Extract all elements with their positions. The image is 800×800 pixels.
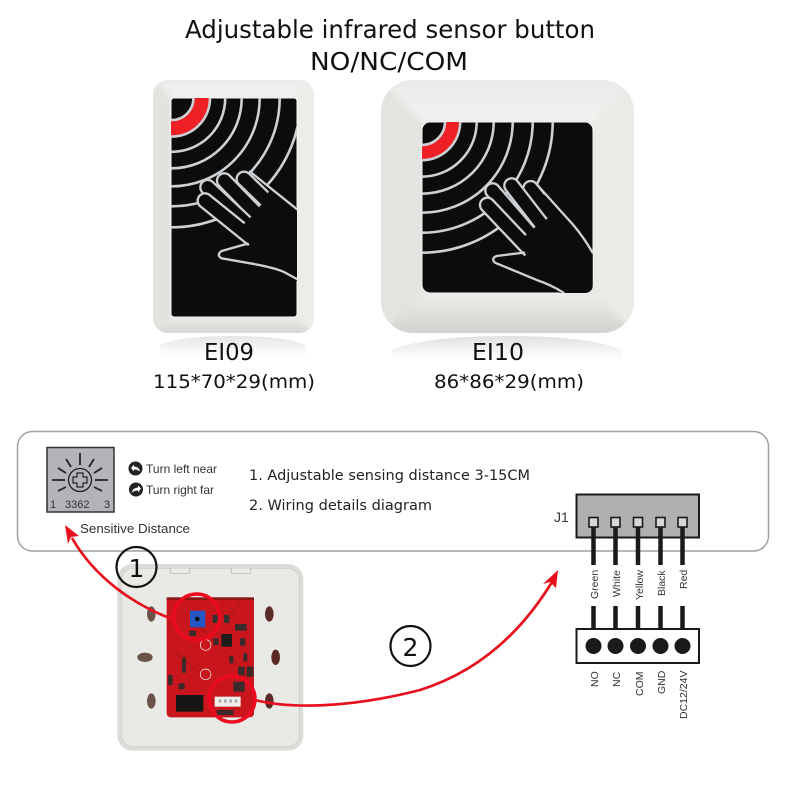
- text: feature list: 2. Wiring details diagram: [249, 498, 432, 514]
- terminal labels: GND: [656, 670, 668, 694]
- arrow 2: to wiring diagram: [255, 570, 558, 706]
- photo: back of device with circuit board: [117, 564, 303, 751]
- title: Adjustable infrared sensor button: [185, 15, 595, 44]
- J1 label: J1: [554, 509, 569, 525]
- label: EI09: [153, 340, 315, 393]
- terminal labels: COM: [634, 672, 646, 696]
- product: EI10 sensor button: [381, 80, 634, 354]
- text: turn left near: Turn left near: [146, 462, 217, 476]
- terminal labels: NO: [589, 671, 601, 687]
- text: feature list: 1. Adjustable sensing distance 3-15CM: [249, 468, 530, 484]
- title: NO/NC/COM: [310, 47, 468, 76]
- text: turn right far: Turn right far: [146, 483, 214, 497]
- title: [185, 15, 595, 76]
- text: feature list: [249, 468, 530, 514]
- J1 connector: [576, 494, 699, 538]
- label: sensitive distance: Sensitive Distance: [80, 522, 190, 536]
- panel: instructions: [18, 432, 768, 551]
- lower wires: [594, 606, 682, 628]
- callout number 1: 1: [129, 554, 144, 583]
- red circle: potentiometer highlight: [174, 594, 220, 640]
- wire colour labels: White: [611, 570, 623, 597]
- wire colour labels: [589, 570, 690, 600]
- icon: potentiometer 3362: 3: [104, 499, 110, 511]
- arrow 1: to sensitive distance: [65, 525, 175, 620]
- icon: potentiometer 3362: [47, 448, 114, 512]
- label: EI09: EI09: [204, 340, 254, 366]
- wire colour labels: Green: [589, 570, 601, 599]
- wiring diagram: [554, 494, 699, 719]
- callout number 2: 2: [403, 633, 418, 662]
- callout number 1: [116, 547, 156, 587]
- terminal labels: DC12/24V: [678, 671, 690, 719]
- terminal labels: [589, 670, 690, 719]
- terminal block: [576, 629, 699, 663]
- callout number 2: [390, 626, 430, 666]
- wire colour labels: Yellow: [634, 570, 646, 600]
- label: EI10: [434, 340, 584, 393]
- terminal labels: NC: [611, 671, 623, 687]
- icon: potentiometer 3362: 3362: [65, 499, 89, 511]
- wire colour labels: Red: [678, 570, 690, 589]
- label: EI10: EI10: [472, 340, 524, 366]
- icon: turn left: [128, 462, 142, 476]
- upper wires: [594, 527, 682, 565]
- red circle: connector highlight: [209, 676, 255, 722]
- label: EI09: 115*70*29(mm): [153, 371, 315, 393]
- product: EI09 sensor button: [153, 80, 314, 350]
- label: EI10: 86*86*29(mm): [434, 371, 584, 393]
- icon: potentiometer 3362: 1: [50, 499, 56, 511]
- icon: turn right: [129, 482, 143, 496]
- wire colour labels: Black: [656, 570, 668, 596]
